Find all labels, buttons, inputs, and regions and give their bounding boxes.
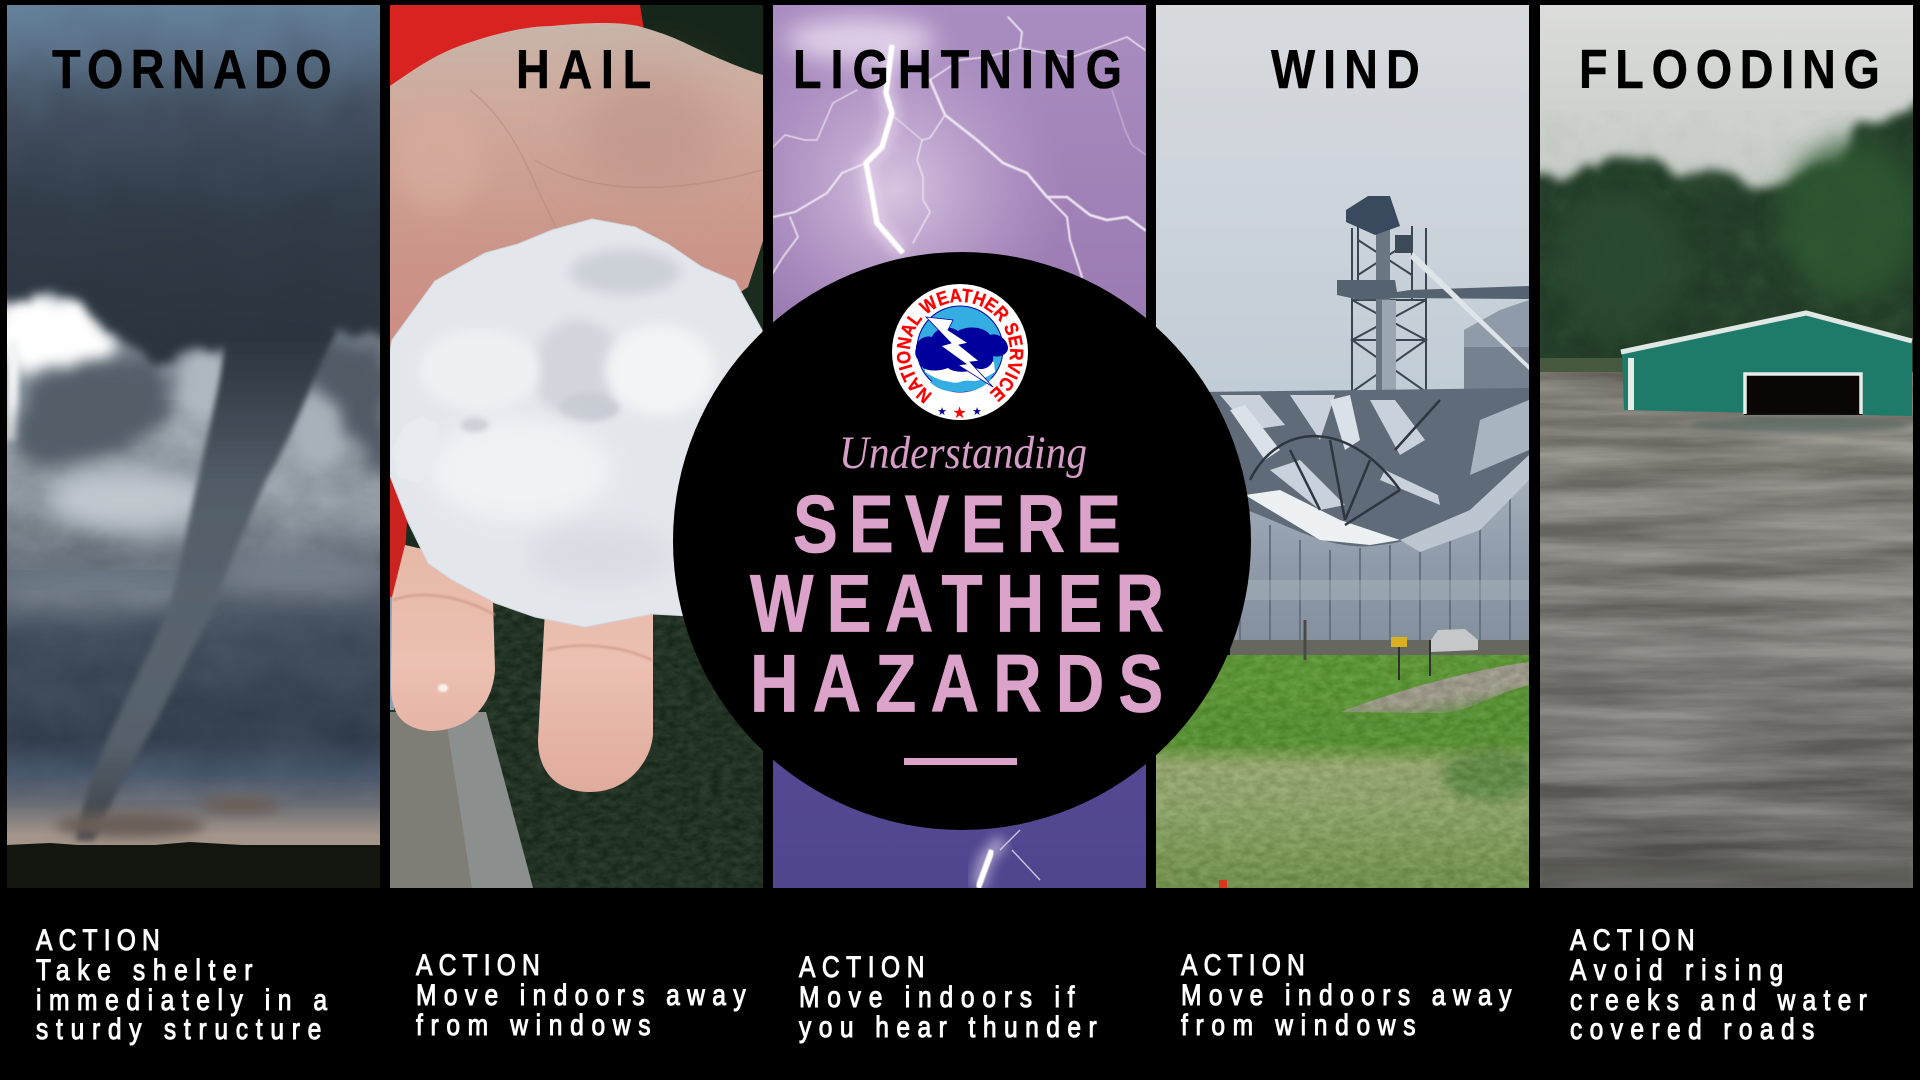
icon: National Weather Service logo: NATIONAL WEATHER SERVICE bbox=[896, 288, 1024, 404]
action text: wind bbox=[1181, 948, 1512, 1042]
action text: flooding bbox=[1570, 923, 1867, 1046]
action text: lightning: you hear thunder bbox=[799, 1010, 1097, 1044]
icon: National Weather Service logo: ★ bbox=[937, 405, 947, 418]
photo: lightning bolts in purple sky bbox=[773, 5, 1146, 888]
title: Severe Weather Hazards bbox=[750, 478, 1164, 729]
action text: lightning: ACTION bbox=[799, 950, 924, 984]
heading: FLOODING: FLOODING bbox=[1579, 38, 1880, 100]
panel: hail bbox=[390, 5, 763, 1042]
title: Severe Weather Hazards: WEATHER bbox=[750, 557, 1164, 649]
heading: LIGHTNING: LIGHTNING bbox=[793, 38, 1122, 100]
action text: tornado bbox=[36, 923, 328, 1046]
action text: wind: ACTION bbox=[1181, 948, 1305, 982]
title: Severe Weather Hazards: HAZARDS bbox=[750, 637, 1163, 729]
photo: grain bin destroyed by wind bbox=[1150, 5, 1538, 888]
action text: flooding: covered roads bbox=[1570, 1012, 1814, 1046]
title: Severe Weather Hazards: SEVERE bbox=[793, 478, 1121, 569]
action text: tornado: immediately in a bbox=[36, 983, 328, 1017]
heading: WIND: WIND bbox=[1271, 38, 1420, 100]
icon: National Weather Service logo: ★ bbox=[972, 405, 982, 418]
heading: TORNADO: TORNADO bbox=[52, 38, 332, 100]
action text: lightning: Move indoors if bbox=[799, 980, 1075, 1014]
action text: lightning bbox=[799, 950, 1097, 1044]
panel: tornado bbox=[0, 0, 400, 1046]
photo: flooded barn and trees bbox=[1540, 5, 1913, 888]
photo: tornado funnel under dark clouds bbox=[0, 0, 400, 888]
panel: wind bbox=[1150, 5, 1538, 1042]
divider rule bbox=[904, 758, 1017, 765]
subtitle: Understanding: Understanding bbox=[839, 427, 1087, 479]
black disc bbox=[673, 252, 1251, 830]
action text: hail: ACTION bbox=[416, 948, 540, 982]
action text: tornado: Take shelter bbox=[36, 953, 252, 987]
action text: flooding: creeks and water bbox=[1570, 983, 1867, 1017]
action text: tornado: sturdy structure bbox=[36, 1012, 321, 1046]
action text: flooding: ACTION bbox=[1570, 923, 1695, 957]
action text: hail bbox=[416, 948, 746, 1042]
action text: wind: from windows bbox=[1181, 1008, 1416, 1042]
action text: hail: Move indoors away bbox=[416, 978, 746, 1012]
heading: HAIL: HAIL bbox=[516, 38, 651, 100]
central title circle bbox=[673, 252, 1251, 830]
action text: wind: Move indoors away bbox=[1181, 978, 1512, 1012]
photo: hailstone in a hand bbox=[390, 5, 763, 888]
action text: flooding: Avoid rising bbox=[1570, 953, 1783, 987]
panel: flooding bbox=[1540, 5, 1913, 1040]
action text: hail: from windows bbox=[416, 1008, 651, 1042]
action text: tornado: ACTION bbox=[36, 923, 160, 957]
panel: lightning bbox=[773, 5, 1146, 1044]
icon: National Weather Service logo: ★ bbox=[952, 403, 967, 422]
